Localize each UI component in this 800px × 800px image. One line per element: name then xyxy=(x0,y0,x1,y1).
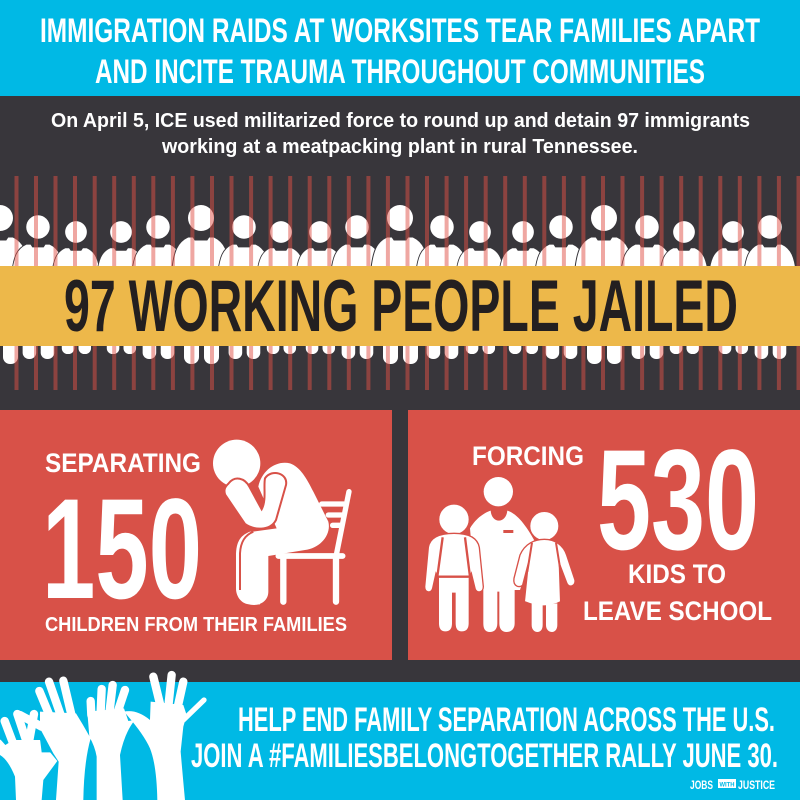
intro text xyxy=(51,110,750,158)
logo: jobs with justice: JUSTICE xyxy=(738,778,775,792)
panel: title banner xyxy=(0,0,800,96)
logo: jobs with justice xyxy=(690,778,775,792)
intro text: On April 5, ICE used militarized force to round up and detain 97 immigrants xyxy=(51,110,750,132)
panel: separating children xyxy=(0,410,392,660)
gap between first two hands xyxy=(39,733,52,752)
icon: raised hands xyxy=(0,675,204,800)
number 150: 150 xyxy=(42,470,202,629)
separating label: SEPARATING xyxy=(45,448,201,478)
kids to label: KIDS TO xyxy=(628,559,726,589)
icon: adult with two children xyxy=(425,477,575,632)
yellow headline band xyxy=(0,266,800,347)
panel: call to action banner xyxy=(0,675,800,800)
logo: jobs with justice: WITH xyxy=(720,782,735,788)
panel: kids leaving school xyxy=(408,410,800,660)
logo: jobs with justice: JOBS xyxy=(690,778,713,792)
leave school label: LEAVE SCHOOL xyxy=(583,596,772,626)
row of detained people xyxy=(0,205,798,364)
forcing label: FORCING xyxy=(472,441,584,471)
intro text: working at a meatpacking plant in rural Tennessee. xyxy=(161,136,638,158)
prison bars xyxy=(14,176,800,390)
icon: seated grieving person xyxy=(213,440,349,605)
caption: CHILDREN FROM THEIR FAMILIES xyxy=(45,614,347,636)
